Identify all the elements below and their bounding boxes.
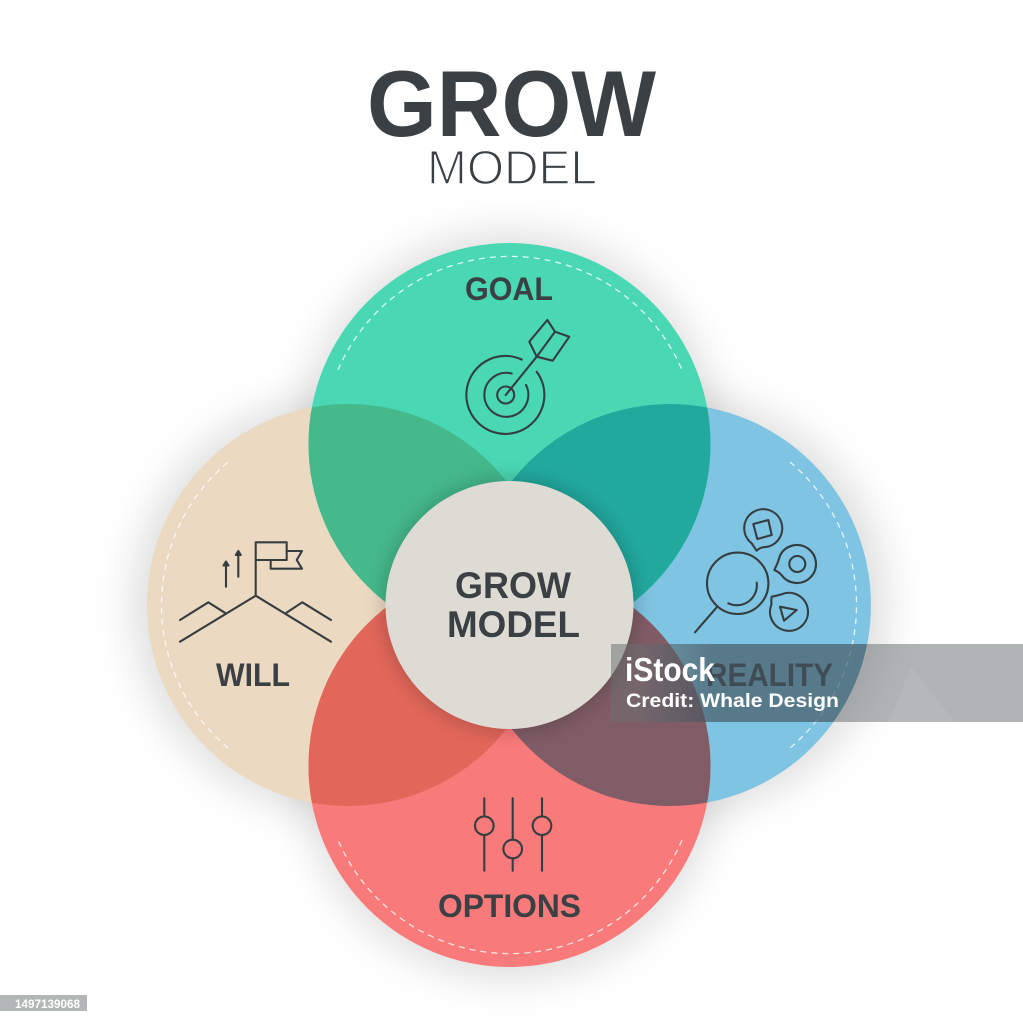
watermark banner xyxy=(611,644,1023,722)
icon: target with dart xyxy=(466,320,569,434)
label: reality: REALITY xyxy=(706,657,833,693)
image id badge xyxy=(0,995,87,1011)
panel: goal circle xyxy=(308,243,710,645)
overlap: options and reality xyxy=(512,608,710,806)
title: MODEL: MODEL xyxy=(427,142,597,195)
label: will: WILL xyxy=(216,657,290,693)
label: goal: GOAL xyxy=(465,271,553,307)
soft shadow beneath circles xyxy=(133,233,887,979)
icon: magnifier with speech bubbles xyxy=(695,509,816,632)
watermark darkening over blue circle xyxy=(660,644,868,722)
title xyxy=(367,51,656,195)
overlap: options and will xyxy=(308,608,506,806)
dashed inner rings xyxy=(161,256,857,954)
center circle xyxy=(386,481,634,729)
watermark: iStock: iStock xyxy=(625,651,716,688)
panel: reality circle xyxy=(469,404,871,806)
image id number: 1497139068 xyxy=(15,997,80,1011)
title: GROW: GROW xyxy=(367,51,656,156)
center label: GROW: GROW xyxy=(455,565,571,606)
center label: MODEL: MODEL xyxy=(447,604,580,645)
overlap: goal and will xyxy=(308,404,506,602)
watermark triangle xyxy=(889,667,955,722)
panel: will circle xyxy=(147,404,549,806)
watermark: credit: Credit: Whale Design xyxy=(626,691,839,712)
center circle shadow xyxy=(382,477,638,733)
panel: options circle xyxy=(308,565,710,967)
overlap: goal and reality xyxy=(512,404,710,602)
icon: sliders xyxy=(475,798,551,871)
label: options: OPTIONS xyxy=(438,888,581,924)
icon: mountain with flag xyxy=(180,542,331,642)
